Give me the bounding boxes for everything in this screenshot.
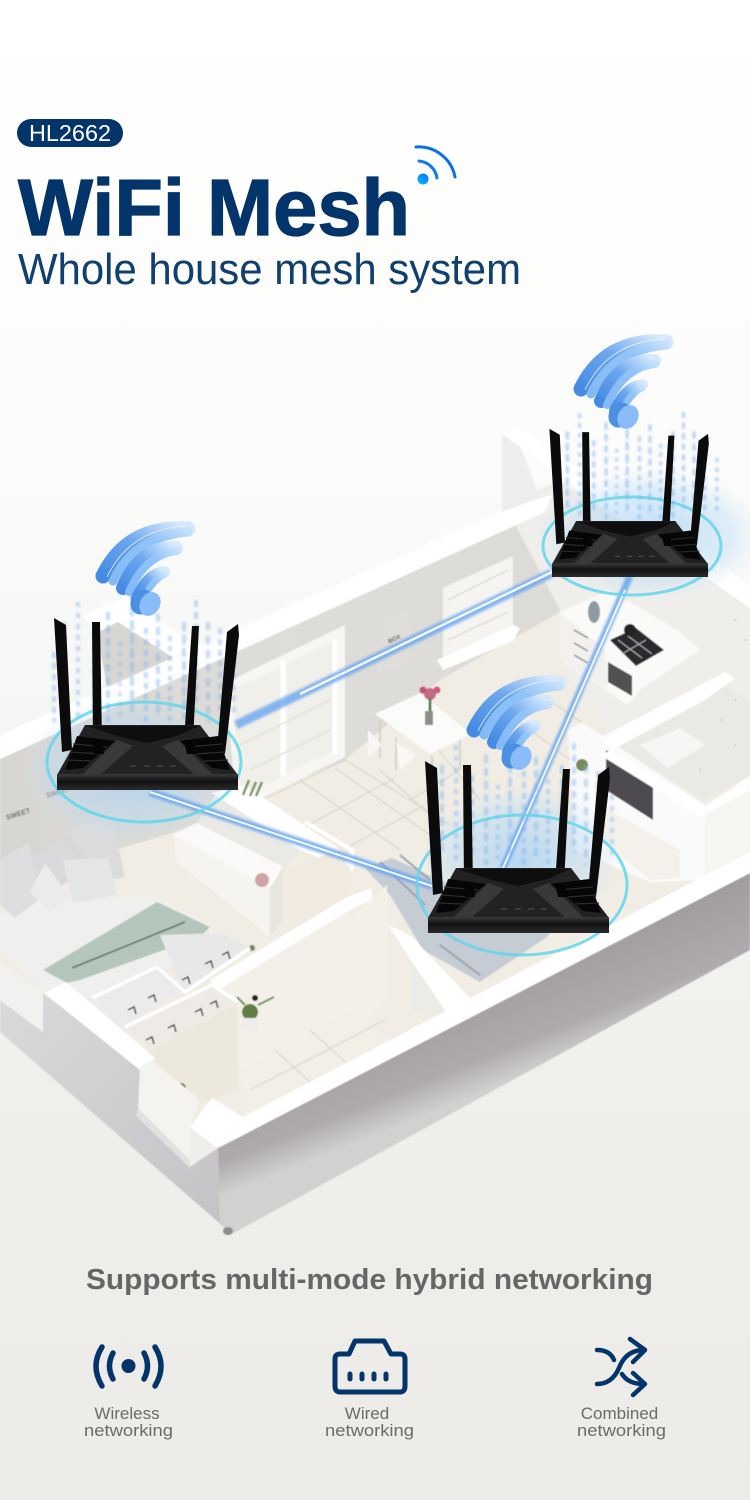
beam: left to bottom router xyxy=(150,792,432,886)
floor xyxy=(0,510,750,1148)
flowers xyxy=(424,688,436,700)
feature: wireless networking xyxy=(84,1347,173,1440)
stove xyxy=(610,628,664,666)
TV wall and console xyxy=(568,672,750,882)
icon: shuffle arrows xyxy=(597,1339,645,1395)
right interior wall xyxy=(505,480,750,770)
signal rain: bottom xyxy=(432,735,612,865)
balcony window lower xyxy=(136,1060,243,1168)
dining table xyxy=(368,686,472,794)
back wall of the house xyxy=(0,497,560,885)
beam: left to right router xyxy=(236,572,552,725)
icon: ethernet port xyxy=(335,1341,405,1392)
plant near left router xyxy=(243,780,262,796)
left wing wall xyxy=(82,597,215,705)
blue sofa xyxy=(365,855,560,982)
feature: combined networking xyxy=(577,1339,666,1440)
bedroom plants on floor xyxy=(249,945,255,951)
wall sign xyxy=(378,606,412,675)
sliding glass door xyxy=(225,625,345,800)
router: left xyxy=(54,618,239,790)
corner short wall xyxy=(502,434,540,512)
bathroom door xyxy=(350,885,387,1033)
signal glow: left router xyxy=(20,698,240,842)
model badge: HL2662 xyxy=(29,120,111,146)
bedroom door xyxy=(283,848,350,940)
blanket xyxy=(43,902,210,983)
bathroom with speckled wall xyxy=(612,620,750,800)
icon: title wifi xyxy=(416,147,455,184)
label: combined: networking xyxy=(577,1421,666,1440)
signal rain: right xyxy=(559,405,717,519)
vase on counter xyxy=(588,601,600,623)
back window xyxy=(437,556,520,670)
illustration: isometric house floor plan xyxy=(0,427,750,1235)
corner wall top band xyxy=(502,427,750,608)
icon: wireless xyxy=(96,1347,161,1386)
dresser in bedroom xyxy=(173,823,283,937)
left outer wall xyxy=(0,993,232,1234)
wall labels xyxy=(5,785,72,822)
wifi icon: bottom xyxy=(474,680,559,774)
right outer wall top band xyxy=(218,852,750,1148)
label: wired: networking xyxy=(325,1421,414,1440)
coverage ring: bottom xyxy=(417,815,627,955)
pillows xyxy=(0,843,45,918)
wardrobe boxes xyxy=(90,933,250,1120)
router: right xyxy=(549,429,709,577)
router: bottom xyxy=(425,761,610,933)
balcony window left xyxy=(0,967,155,1070)
living room partition with door frame xyxy=(197,785,355,870)
wall labels: SWEET xyxy=(45,785,72,800)
subtitle: Whole house mesh system xyxy=(18,245,521,294)
small plant by window xyxy=(176,1083,186,1093)
beam: right to bottom router xyxy=(503,576,630,868)
signal glow: bottom router xyxy=(420,785,620,935)
kitchen counter xyxy=(560,590,700,705)
signal glow: right router xyxy=(535,470,750,600)
partition wall xyxy=(210,888,372,1070)
oven xyxy=(608,662,632,696)
section heading: Supports multi-mode hybrid networking xyxy=(86,1264,653,1296)
living room floor tiles xyxy=(262,680,600,860)
wifi icon: right xyxy=(581,339,666,433)
label: combined: Combined xyxy=(581,1404,658,1423)
label: wireless: Wireless xyxy=(94,1404,160,1423)
title: WiFi Mesh xyxy=(18,163,410,252)
wall labels: SWEET xyxy=(5,807,32,822)
back wall top band xyxy=(0,495,552,759)
bathroom floor xyxy=(240,1010,412,1140)
coverage ring: right xyxy=(543,497,721,595)
label: wired: Wired xyxy=(345,1404,389,1423)
small partition xyxy=(388,925,472,1015)
plant on partition xyxy=(237,995,274,1030)
coverage ring: left xyxy=(47,702,241,822)
wifi icon: left xyxy=(103,526,188,620)
house foot shadow xyxy=(223,1227,233,1235)
signal rain: left xyxy=(54,592,234,722)
right outer wall xyxy=(218,873,750,1234)
feature: wired networking xyxy=(325,1341,414,1440)
bed xyxy=(0,818,225,997)
label: wireless: networking xyxy=(84,1421,173,1440)
wall sign: BOX xyxy=(388,634,402,645)
